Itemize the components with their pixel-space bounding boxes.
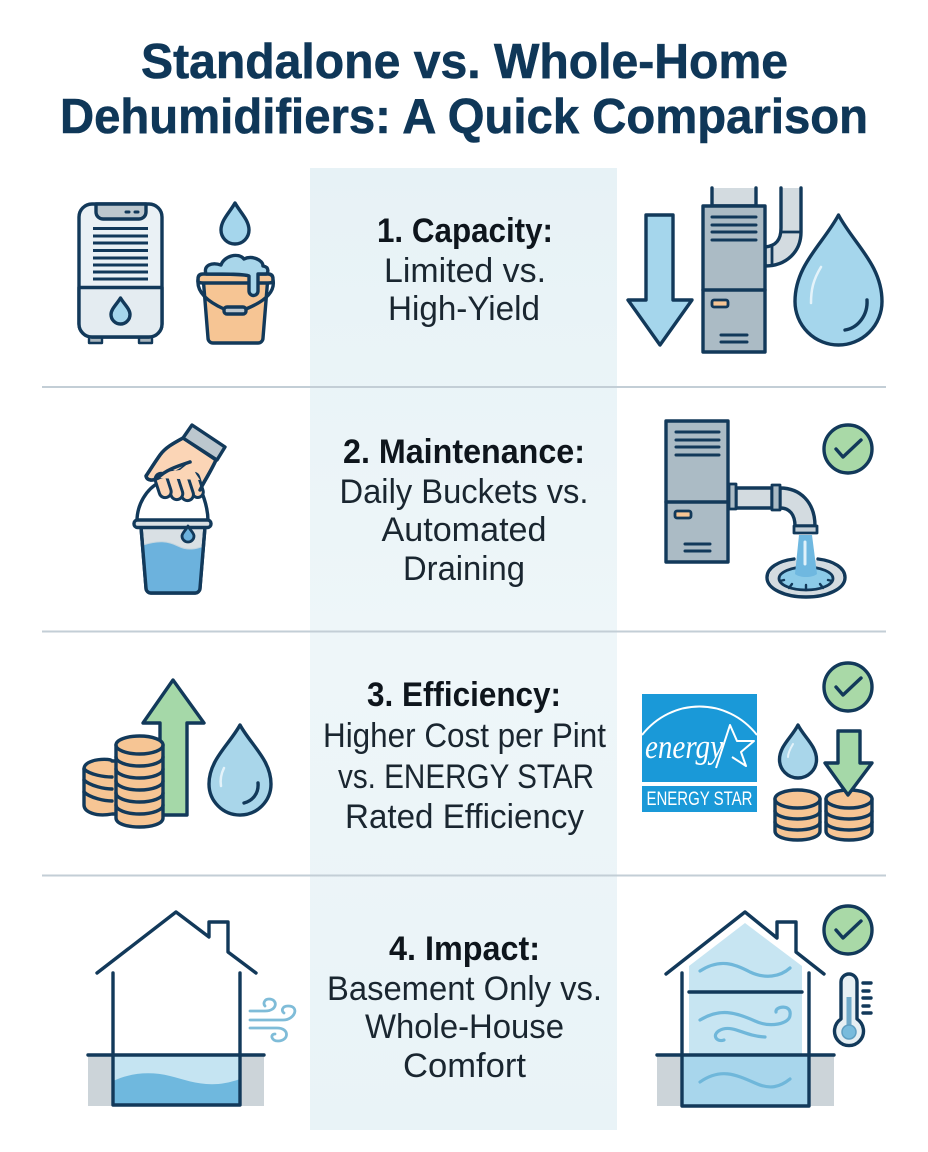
icon: thermometer — [834, 974, 871, 1046]
text block: impact: Whole-House — [365, 1008, 564, 1046]
icon: upward arrow — [143, 680, 204, 815]
icon: water drop over bucket — [221, 203, 249, 244]
text block: efficiency: vs. ENERGY STAR — [338, 758, 594, 796]
icon: energy star logo — [642, 694, 757, 812]
text block: impact: Comfort — [403, 1047, 527, 1085]
text block: efficiency: 3. Efficiency: — [367, 676, 561, 714]
icon: coin stacks rising — [84, 736, 163, 827]
icon: house with damp basement — [88, 912, 264, 1106]
icon: whole-home unit with ducts — [703, 188, 801, 352]
text block: capacity: High-Yield — [388, 290, 540, 328]
icon: downward arrow — [825, 731, 872, 795]
icon: green check — [824, 663, 872, 711]
text block: maintenance: Draining — [403, 550, 525, 588]
text block: efficiency — [323, 676, 607, 836]
icon: wind gusts — [250, 999, 295, 1041]
text block: maintenance: 2. Maintenance: — [343, 433, 585, 471]
icon: energy star logo: energy — [645, 729, 724, 766]
icon: coin stacks lowered — [775, 790, 872, 840]
text block: impact: Basement Only vs. — [327, 970, 602, 1008]
icon: energy star logo: ENERGY STAR — [646, 789, 752, 810]
text block: capacity — [377, 212, 553, 328]
text block: efficiency: Higher Cost per Pint — [323, 717, 607, 755]
text block: impact — [327, 930, 602, 1085]
text block: efficiency: Rated Efficiency — [345, 798, 584, 836]
icon: green check — [824, 906, 872, 954]
text block: maintenance — [340, 433, 588, 588]
icon: hand carrying bucket — [134, 425, 225, 593]
icon: green check — [824, 425, 872, 473]
panel: center comparison column — [310, 168, 617, 1130]
text block: maintenance: Daily Buckets vs. — [340, 473, 588, 511]
title: Standalone vs. Whole-Home — [141, 35, 788, 89]
icon: downward arrow — [628, 215, 692, 345]
icon: overflowing bucket — [198, 255, 273, 343]
icon: small water drop — [780, 725, 816, 778]
icon: large water drop — [795, 215, 882, 345]
text block: impact: 4. Impact: — [389, 930, 540, 968]
text block: capacity: 1. Capacity: — [377, 212, 553, 250]
icon: floor drain — [767, 559, 845, 597]
text block: maintenance: Automated — [382, 511, 546, 549]
text block: capacity: Limited vs. — [384, 252, 546, 290]
title — [60, 35, 868, 144]
icon: water drop — [209, 725, 271, 815]
icon: standalone dehumidifier — [79, 204, 162, 343]
title: Dehumidifiers: A Quick Comparison — [60, 90, 868, 144]
icon: house with whole-home comfort — [657, 912, 834, 1106]
icon: whole-home unit with drain pipe — [666, 421, 845, 597]
